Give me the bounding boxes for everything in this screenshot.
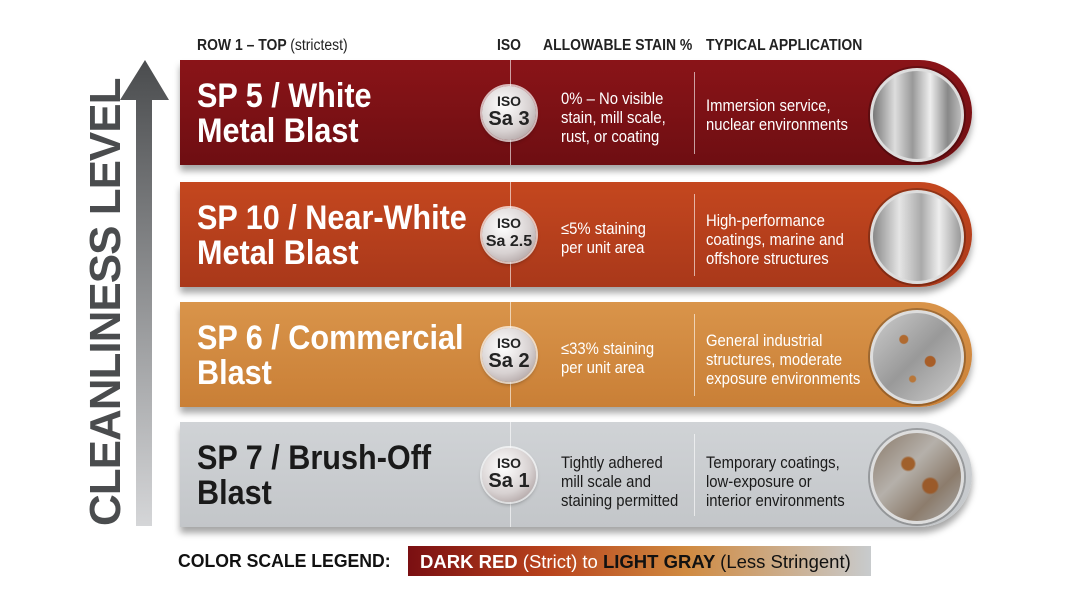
headers: TYPICAL APPLICATION	[706, 37, 862, 54]
row 1: SP5	[180, 60, 972, 165]
row 1: SP5: rust, or coating	[561, 128, 659, 146]
row 3: SP6: ≤33% staining	[561, 340, 654, 358]
row 3: SP6: structures, moderate	[706, 351, 842, 369]
arrow: cleanliness level: CLEANLINESS LEVEL	[81, 78, 130, 526]
row 4: SP7: low-exposure or	[706, 473, 812, 491]
row 2: SP10: High-performance	[706, 212, 825, 230]
row 1: SP5: Sa 3	[488, 108, 530, 130]
row 4: SP7: Sa 1	[488, 470, 530, 492]
headers	[197, 37, 862, 54]
legend: DARK RED (Strict) to LIGHT GRAY (Less Stringent)	[420, 551, 851, 572]
row 4: SP7: Blast	[197, 474, 272, 512]
row 3: SP6: SP 6 / Commercial	[197, 319, 463, 357]
row 1: SP5: ISO	[497, 93, 521, 109]
row 3: SP6: Sa 2	[488, 350, 530, 372]
row 2: SP10: ISO	[497, 215, 521, 231]
row 4: SP7: mill scale and	[561, 473, 651, 491]
row 4: SP7: ISO	[497, 455, 521, 471]
row 2: SP10: ≤5% staining	[561, 220, 646, 238]
headers: ISO	[497, 37, 521, 54]
row 3: SP6: exposure environments	[706, 370, 860, 388]
row 4: SP7: interior environments	[706, 492, 845, 510]
row 1: SP5: Immersion service,	[706, 97, 831, 115]
row 4: SP7: Temporary coatings,	[706, 454, 840, 472]
headers: ALLOWABLE STAIN %	[543, 37, 692, 54]
row 3: SP6: per unit area	[561, 359, 644, 377]
row 1: SP5: stain, mill scale,	[561, 109, 666, 127]
row 4: SP7: SP 7 / Brush-Off	[197, 439, 431, 477]
row 1: SP5: 0% – No visible	[561, 90, 663, 108]
headers: ROW 1 – TOP (strictest)	[197, 37, 348, 54]
row 2: SP10: per unit area	[561, 239, 644, 257]
row 4: SP7: staining permitted	[561, 492, 678, 510]
row 2: SP10: coatings, marine and	[706, 231, 844, 249]
row 2: SP10: SP 10 / Near-White	[197, 199, 467, 237]
row 2: SP10: Metal Blast	[197, 234, 359, 272]
row 4: SP7: Tightly adhered	[561, 454, 663, 472]
legend: COLOR SCALE LEGEND:	[178, 551, 391, 571]
legend	[178, 546, 871, 576]
row 1: SP5: Metal Blast	[197, 112, 359, 150]
row 3: SP6: General industrial	[706, 332, 822, 350]
row 1: SP5: SP 5 / White	[197, 77, 372, 115]
row 1: SP5: nuclear environments	[706, 116, 848, 134]
row 3: SP6: ISO	[497, 335, 521, 351]
row 2: SP10	[180, 182, 972, 287]
row 2: SP10: Sa 2.5	[486, 233, 532, 250]
arrow: cleanliness level	[81, 60, 169, 526]
row 3: SP6	[180, 302, 972, 407]
row 2: SP10: offshore structures	[706, 250, 829, 268]
row 4: SP7	[180, 422, 972, 527]
row 3: SP6: Blast	[197, 354, 272, 392]
